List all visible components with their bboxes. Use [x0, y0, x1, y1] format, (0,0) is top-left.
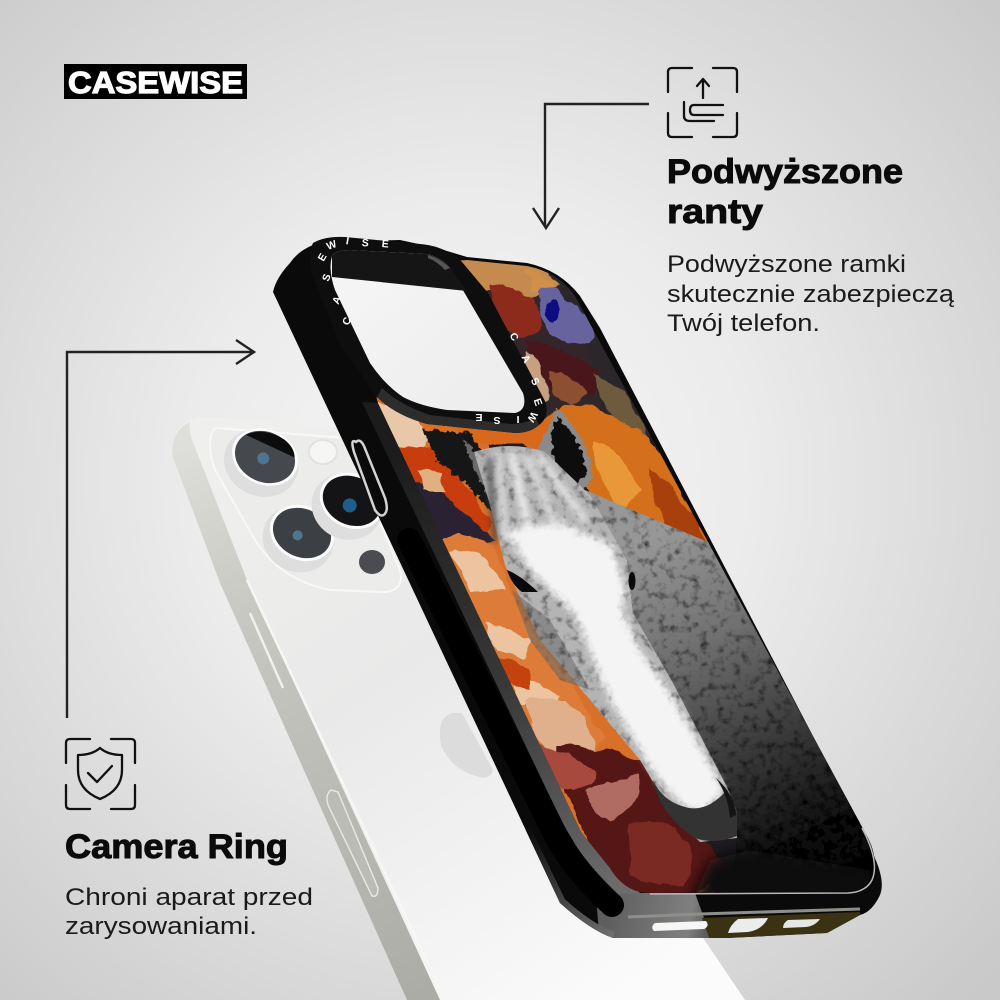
ring inner wall highlight	[428, 255, 450, 270]
camera ring	[310, 235, 547, 433]
orange mass	[545, 404, 715, 550]
arrow: to raised edges	[533, 104, 649, 228]
ring text top left: CASEWISE	[316, 235, 389, 327]
text: camera ring description: Chroni aparat przed	[65, 884, 313, 911]
port 1	[652, 921, 708, 931]
nostril	[716, 778, 736, 818]
maroon middle	[525, 340, 600, 400]
orange highlight	[590, 440, 640, 510]
side button lower	[327, 790, 378, 896]
port 3	[783, 919, 820, 928]
neck	[585, 490, 874, 883]
lens 2	[252, 493, 345, 584]
muzzle	[653, 780, 737, 841]
ring inner wall	[332, 250, 467, 291]
icon: shield	[66, 739, 135, 809]
ring text right: CASEWISE	[475, 331, 544, 426]
deep orange	[650, 470, 712, 548]
art base	[376, 396, 874, 892]
tan right	[595, 375, 650, 440]
text: raised edges description: Podwyższone ramki	[667, 251, 906, 278]
forelock streaks	[490, 455, 585, 540]
right ear	[535, 408, 592, 497]
port 2	[728, 918, 768, 933]
top orange patch	[524, 269, 554, 292]
artwork: horse and flowers	[376, 260, 874, 893]
flash	[309, 440, 337, 464]
white phone	[172, 416, 745, 1000]
heading: raised edges	[667, 153, 903, 231]
text: camera ring description: zarysowaniami.	[65, 913, 257, 940]
text: raised edges description: skutecznie zabezpieczą	[667, 281, 955, 308]
phone side edge	[172, 422, 440, 1000]
pink blob	[585, 775, 640, 820]
case lower corner grey	[596, 893, 710, 938]
apple logo shadow	[440, 713, 493, 778]
right eye	[628, 572, 636, 590]
left eye	[507, 570, 538, 592]
sensor	[359, 550, 385, 574]
base highlight line	[628, 909, 860, 917]
dark wedge	[416, 482, 496, 543]
top tan	[460, 260, 560, 298]
brown red lower	[630, 821, 693, 886]
left orange base	[360, 395, 720, 905]
navy	[546, 300, 560, 322]
phone edge highlight	[247, 580, 445, 1000]
case body	[273, 240, 882, 938]
phone body	[172, 417, 745, 1000]
dark red lower	[555, 745, 730, 900]
text: raised edges description: Twój telefon.	[667, 310, 820, 337]
side button upper	[250, 613, 283, 688]
logo: CASEWISE	[68, 65, 243, 100]
horse head	[474, 446, 737, 842]
arrow: to camera ring	[67, 340, 254, 718]
case outer rim lower	[525, 830, 613, 938]
dark bottom	[686, 849, 870, 892]
orange under ring	[450, 418, 550, 450]
left ear	[423, 430, 497, 512]
icon: raised edges	[668, 68, 737, 137]
side button silver	[352, 441, 387, 516]
heading: raised edges: Podwyższone	[667, 153, 903, 191]
text: raised edges description	[667, 251, 955, 337]
pale flower	[525, 697, 596, 752]
salmon petals	[540, 745, 596, 790]
peach under red	[418, 470, 445, 492]
top peach	[378, 402, 428, 448]
heading: raised edges: ranty	[667, 193, 763, 231]
side slot	[409, 540, 612, 905]
peach petals	[450, 550, 560, 715]
case left rim	[362, 402, 640, 895]
text: camera ring description	[65, 884, 313, 940]
ring outer	[310, 237, 547, 433]
ring lower bevel	[377, 388, 539, 433]
brown middle	[550, 372, 588, 405]
face highlight	[505, 522, 724, 812]
upper art base	[486, 273, 650, 436]
art right highlight	[650, 828, 874, 894]
orange flower	[440, 534, 605, 760]
peach near ring	[524, 350, 550, 402]
face mottled shade	[512, 590, 590, 690]
red petals	[498, 658, 530, 708]
flowers	[360, 250, 730, 905]
lens 1	[213, 416, 310, 509]
black case	[273, 240, 882, 945]
dark upper right	[554, 277, 608, 411]
case olive base	[702, 912, 860, 940]
camera plateau	[210, 428, 401, 592]
ring hole	[331, 250, 524, 413]
purple	[538, 287, 594, 344]
lens 3	[300, 460, 394, 551]
heading: camera ring: Camera Ring	[65, 828, 288, 866]
top red	[490, 285, 542, 338]
red band	[395, 445, 492, 533]
